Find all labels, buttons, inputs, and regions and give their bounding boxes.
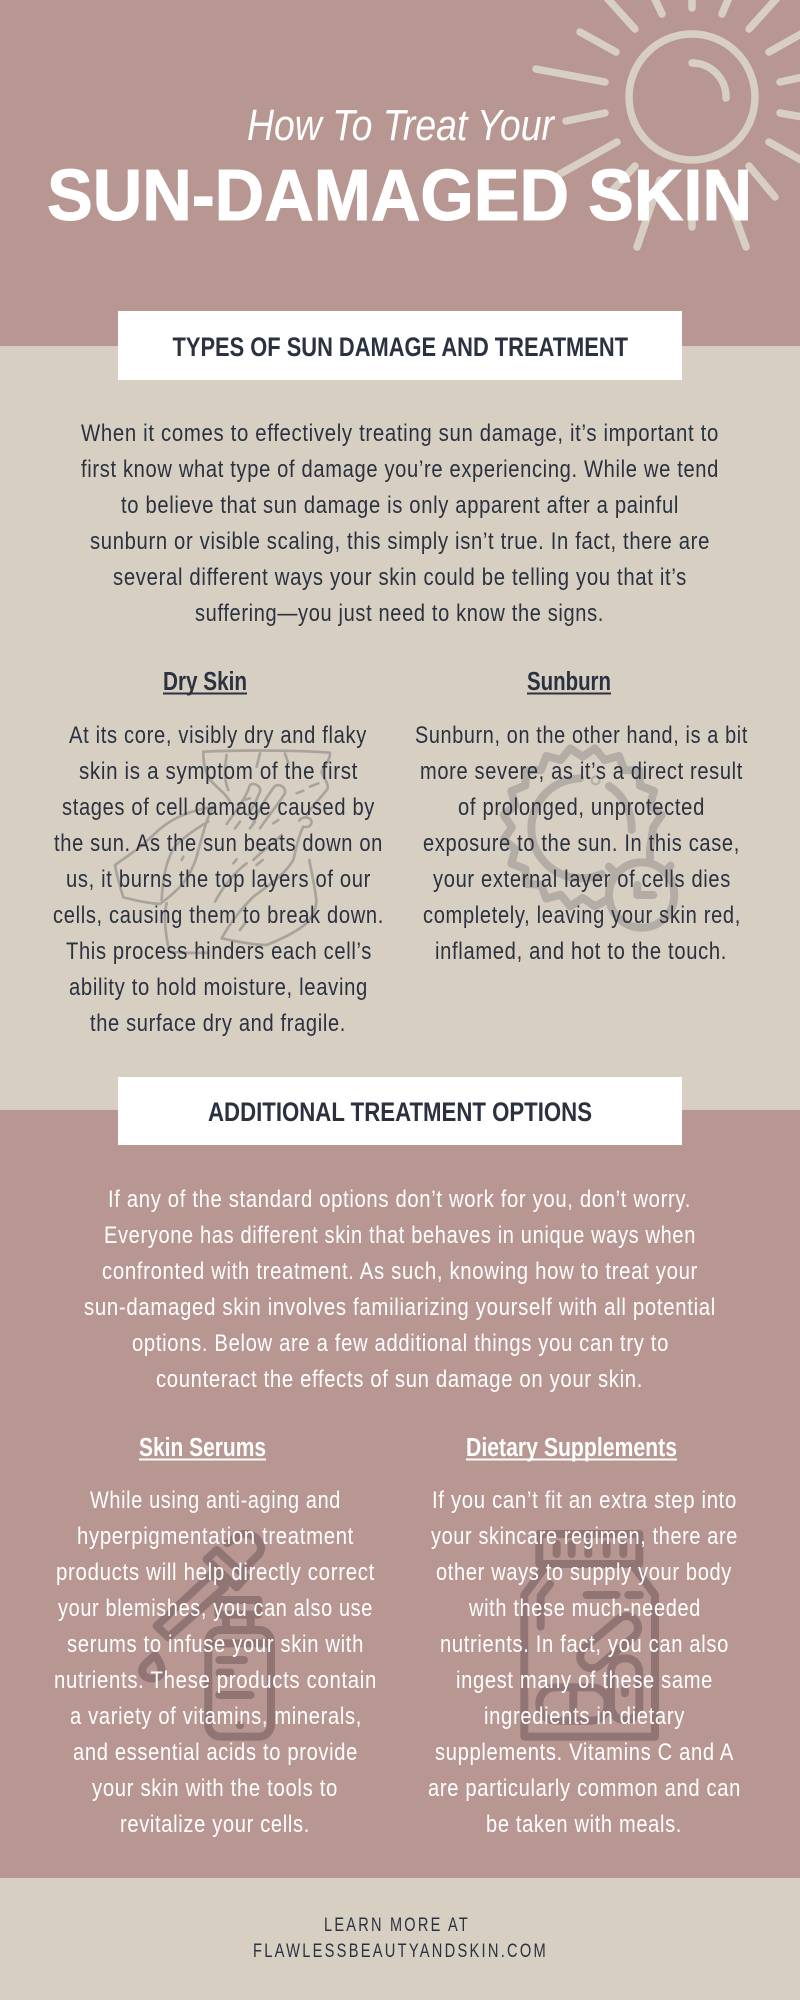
text: skin serums: nutrients. These products contain — [54, 1667, 377, 1694]
icon: serum bottle and dropper — [142, 1534, 271, 1737]
text: dietary supplements — [428, 1487, 741, 1838]
text: dietary supplements: supplements. Vitamins C and A — [435, 1739, 734, 1766]
beige section background — [0, 346, 800, 1110]
text: sunburn: inflamed, and hot to the touch. — [435, 938, 727, 965]
text: dry skin: the surface dry and fragile. — [90, 1010, 346, 1037]
text: dietary supplements: be taken with meals. — [486, 1811, 682, 1838]
text: dietary supplements: your skincare regimen, there are — [431, 1523, 738, 1550]
text: skin serums: your blemishes, you can also use — [58, 1595, 373, 1622]
intro paragraph: additional options: If any of the standard options don’t work for you, don’t worry. — [108, 1186, 691, 1213]
icon: sun — [536, 0, 800, 247]
intro paragraph: sun damage: several different ways your skin could be telling you that it’s — [113, 564, 687, 591]
footer call to action: FLAWLESSBEAUTYANDSKIN.COM — [253, 1940, 548, 1962]
intro paragraph: sun damage: to believe that sun damage is only apparent after a painful — [121, 492, 679, 519]
text: dietary supplements: If you can’t fit an extra step into — [432, 1487, 737, 1514]
subheading: dry skin: Dry Skin — [163, 668, 247, 696]
text: skin serums: serums to infuse your skin with — [67, 1631, 364, 1658]
text: dry skin: us, it burns the top layers of our — [66, 866, 371, 893]
text: sunburn: exposure to the sun. In this case, — [423, 830, 740, 857]
icon: supplement bottle with pills — [524, 1534, 655, 1737]
intro paragraph: sun damage — [81, 420, 719, 627]
footer band — [0, 1878, 800, 2000]
intro paragraph: additional options: options. Below are a few additional things you can try to — [132, 1330, 669, 1357]
subheading: skin serums: Skin Serums — [139, 1434, 266, 1462]
text: dry skin: This process hinders each cell’s — [66, 938, 372, 965]
text: dietary supplements: ingest many of these same — [456, 1667, 713, 1694]
header band — [0, 0, 800, 346]
text: dry skin: stages of cell damage caused by — [62, 794, 375, 821]
icon: sun with clock — [504, 748, 674, 928]
subheading: sunburn: Sunburn — [527, 668, 611, 696]
title: How To Treat Your — [247, 102, 555, 150]
footer call to action — [253, 1914, 548, 1962]
footer call to action: LEARN MORE AT — [324, 1914, 470, 1936]
text: dry skin: ability to hold moisture, leaving — [69, 974, 368, 1001]
icon: peeling skin hand — [115, 751, 330, 953]
text: dietary supplements: with these much-needed — [468, 1595, 701, 1622]
text: skin serums — [54, 1487, 377, 1838]
text: sunburn — [415, 722, 748, 965]
text: dry skin: the sun. As the sun beats down on — [54, 830, 383, 857]
intro paragraph: additional options: confronted with treatment. As such, knowing how to treat your — [102, 1258, 698, 1285]
text: dry skin: cells, causing them to break down. — [53, 902, 384, 929]
text: dietary supplements: are particularly common and can — [428, 1775, 741, 1802]
text: skin serums: While using anti-aging and — [90, 1487, 341, 1514]
title: SUN-DAMAGED SKIN — [47, 156, 752, 236]
intro paragraph: additional options — [84, 1186, 716, 1393]
text: skin serums: a variety of vitamins, minerals, — [70, 1703, 362, 1730]
text: sunburn: completely, leaving your skin red, — [423, 902, 741, 929]
title — [47, 102, 752, 236]
text: skin serums: your skin with the tools to — [92, 1775, 338, 1802]
text: skin serums: products will help directly correct — [56, 1559, 375, 1586]
text: dry skin: At its core, visibly dry and flaky — [69, 722, 367, 749]
text: skin serums: hyperpigmentation treatment — [77, 1523, 354, 1550]
text: sunburn: of prolonged, unprotected — [458, 794, 705, 821]
text: dry skin — [53, 722, 384, 1037]
text: skin serums: and essential acids to provide — [73, 1739, 358, 1766]
text: dietary supplements: other ways to supply your body — [436, 1559, 732, 1586]
heading box: additional treatment options: ADDITIONAL TREATMENT OPTIONS — [208, 1097, 592, 1127]
heading box: types of sun damage: TYPES OF SUN DAMAGE AND TREATMENT — [172, 332, 628, 362]
intro paragraph: additional options: counteract the effects of sun damage on your skin. — [156, 1366, 643, 1393]
subheading: dietary supplements: Dietary Supplements — [466, 1434, 677, 1462]
text: dietary supplements: ingredients in dietary — [484, 1703, 685, 1730]
text: dry skin: skin is a symptom of the first — [79, 758, 358, 785]
text: dietary supplements: nutrients. In fact, you can also — [440, 1631, 729, 1658]
text: sunburn: your external layer of cells dies — [433, 866, 731, 893]
heading box: additional treatment options — [118, 1077, 682, 1145]
text: skin serums: revitalize your cells. — [120, 1811, 310, 1838]
intro paragraph: sun damage: suffering—you just need to know the signs. — [195, 600, 604, 627]
rose section background — [0, 1110, 800, 1878]
heading box: types of sun damage — [118, 311, 682, 380]
